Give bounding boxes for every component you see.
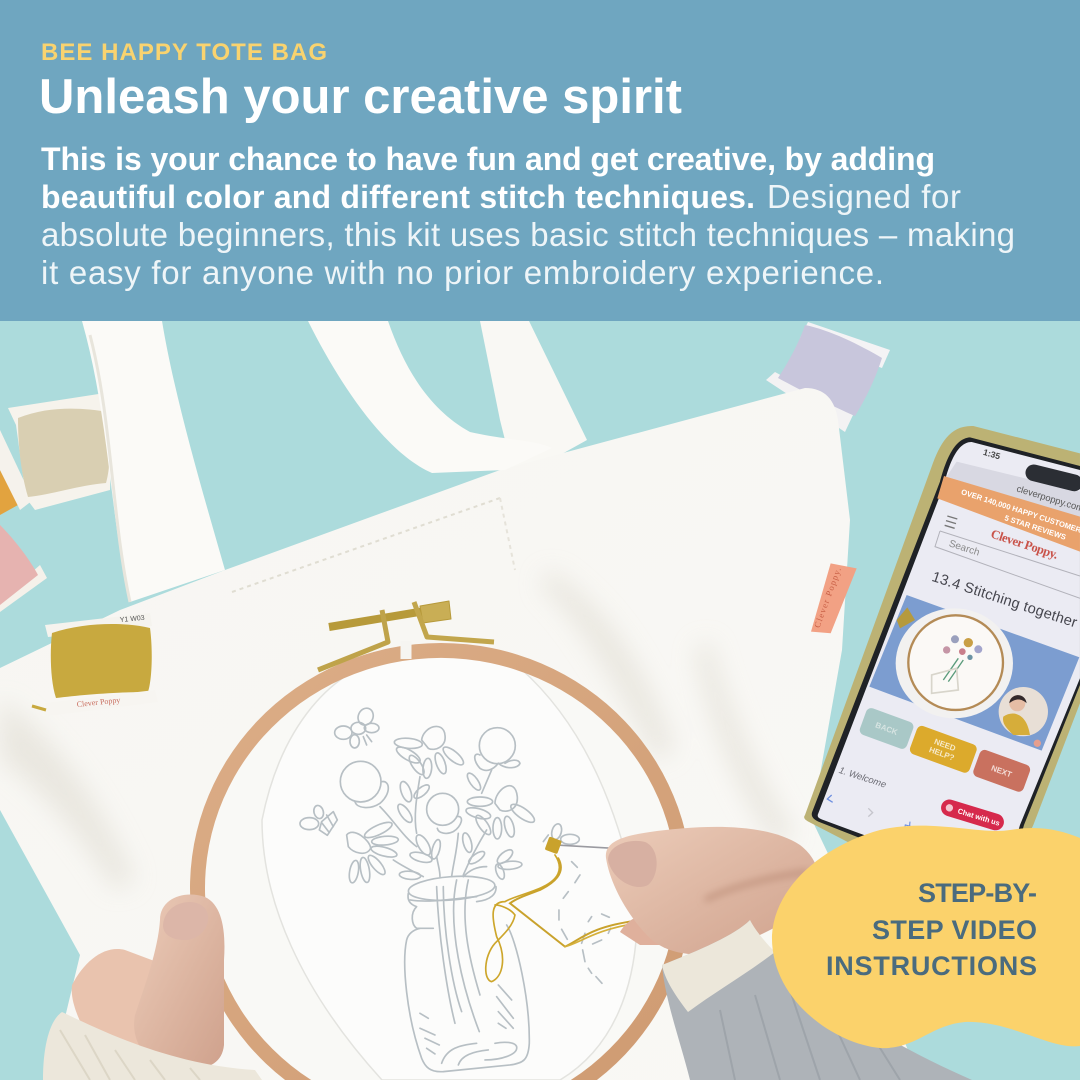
needle bbox=[555, 845, 613, 848]
right hand bbox=[606, 827, 819, 954]
lesson title: 13.4 Stitching together bbox=[930, 569, 1079, 631]
brand name: Clever Poppy. bbox=[989, 527, 1060, 562]
thread spool: gold: Y1 W03 bbox=[120, 615, 145, 624]
callout text: STEP-BY- bbox=[918, 878, 1037, 908]
lesson list item: 1. Welcome bbox=[838, 765, 887, 790]
left bee bbox=[300, 804, 337, 835]
orange woven tag: Clever Poppy. bbox=[812, 566, 843, 629]
right daisy bbox=[465, 786, 537, 839]
back button bbox=[858, 707, 915, 750]
upper daisy bbox=[394, 726, 466, 779]
screw gap bbox=[400, 641, 412, 659]
fabric folds bbox=[0, 570, 795, 890]
thread spools: left side bbox=[0, 393, 112, 612]
body text: absolute beginners, this kit uses basic stitch techniques – making bbox=[41, 216, 1015, 253]
phone bbox=[804, 426, 1080, 867]
top bee bbox=[335, 706, 379, 748]
gold thread and needle bbox=[486, 836, 637, 982]
next button: NEXT bbox=[990, 764, 1013, 779]
wooden ring bbox=[190, 643, 692, 1080]
need help button: NEED bbox=[933, 737, 957, 753]
thread spool: gold bbox=[32, 613, 158, 716]
thumb bbox=[134, 895, 224, 1069]
circle flowers bbox=[479, 728, 515, 764]
sepals bbox=[475, 754, 498, 770]
dynamic island bbox=[1024, 463, 1080, 493]
need help button: HELP? bbox=[928, 745, 956, 763]
embroidery hoop bbox=[190, 601, 692, 1080]
lower-left daisy bbox=[347, 819, 399, 884]
phone screen bbox=[818, 442, 1080, 860]
instructor video circle bbox=[999, 687, 1048, 736]
callout text bbox=[826, 878, 1037, 981]
left knit cuff bbox=[43, 1012, 262, 1080]
title: Unleash your creative spirit bbox=[39, 70, 682, 124]
fingernail bbox=[608, 841, 657, 887]
stems and leaves bbox=[415, 777, 420, 833]
search box bbox=[935, 531, 1080, 598]
callout text: STEP VIDEO bbox=[872, 915, 1037, 945]
chat pill bbox=[939, 797, 1006, 832]
lesson photo bbox=[869, 595, 1079, 751]
need help button bbox=[908, 724, 978, 774]
phone: 5 STAR REVIEWS bbox=[1003, 513, 1067, 542]
thread spool: lavender bbox=[766, 322, 890, 432]
transfer stabiliser sheet bbox=[262, 652, 637, 1080]
phone: 1:35 bbox=[982, 447, 1002, 461]
browser nav icons bbox=[827, 795, 833, 802]
photo background: mint table bbox=[0, 321, 1080, 1080]
fabric in hoop bbox=[205, 658, 677, 1080]
shadow between fingers bbox=[705, 872, 808, 900]
phone case bbox=[804, 426, 1080, 867]
thumbnail bbox=[163, 902, 208, 940]
header panel bbox=[0, 0, 1080, 321]
middle finger bbox=[620, 913, 680, 945]
back button: BACK bbox=[874, 721, 899, 737]
eyebrow heading: BEE HAPPY TOTE BAG bbox=[41, 39, 327, 66]
orange woven tag bbox=[811, 563, 857, 633]
left hand bbox=[72, 895, 224, 1075]
left handle bbox=[82, 321, 225, 602]
body text: This is your chance to have fun and get creative, by adding bbox=[41, 141, 935, 177]
mason jar bbox=[405, 874, 529, 1072]
tote bag bbox=[0, 321, 920, 1080]
embroidered bouquet bbox=[932, 635, 982, 693]
thread spool: gold: Clever Poppy bbox=[76, 695, 121, 709]
line-art bouquet transfer bbox=[300, 706, 611, 1072]
stitched knot bbox=[545, 836, 562, 854]
bag body bbox=[0, 388, 920, 1080]
orange promo banner bbox=[937, 476, 1080, 552]
right sleeve bbox=[662, 920, 972, 1080]
stitch-guide bee, dashed bbox=[543, 823, 579, 844]
callout blob bbox=[772, 826, 1080, 1048]
front handle bbox=[308, 321, 552, 473]
chat pill: Chat with us bbox=[957, 806, 1001, 828]
menu icon bbox=[945, 516, 957, 528]
seam stitching bbox=[232, 498, 500, 592]
body text: it easy for anyone with no prior embroidery experience. bbox=[41, 254, 884, 291]
body text bbox=[41, 141, 1015, 291]
callout text: INSTRUCTIONS bbox=[826, 951, 1037, 981]
body text: Designed for bbox=[767, 178, 961, 215]
back handle bbox=[480, 321, 587, 480]
address bar bbox=[947, 462, 1080, 518]
loose thread bbox=[486, 855, 559, 982]
body text: beautiful color and different stitch techniques. bbox=[41, 179, 755, 215]
phone: Search bbox=[947, 538, 981, 559]
next button bbox=[972, 748, 1032, 793]
brass clamp and screw bbox=[318, 601, 494, 670]
